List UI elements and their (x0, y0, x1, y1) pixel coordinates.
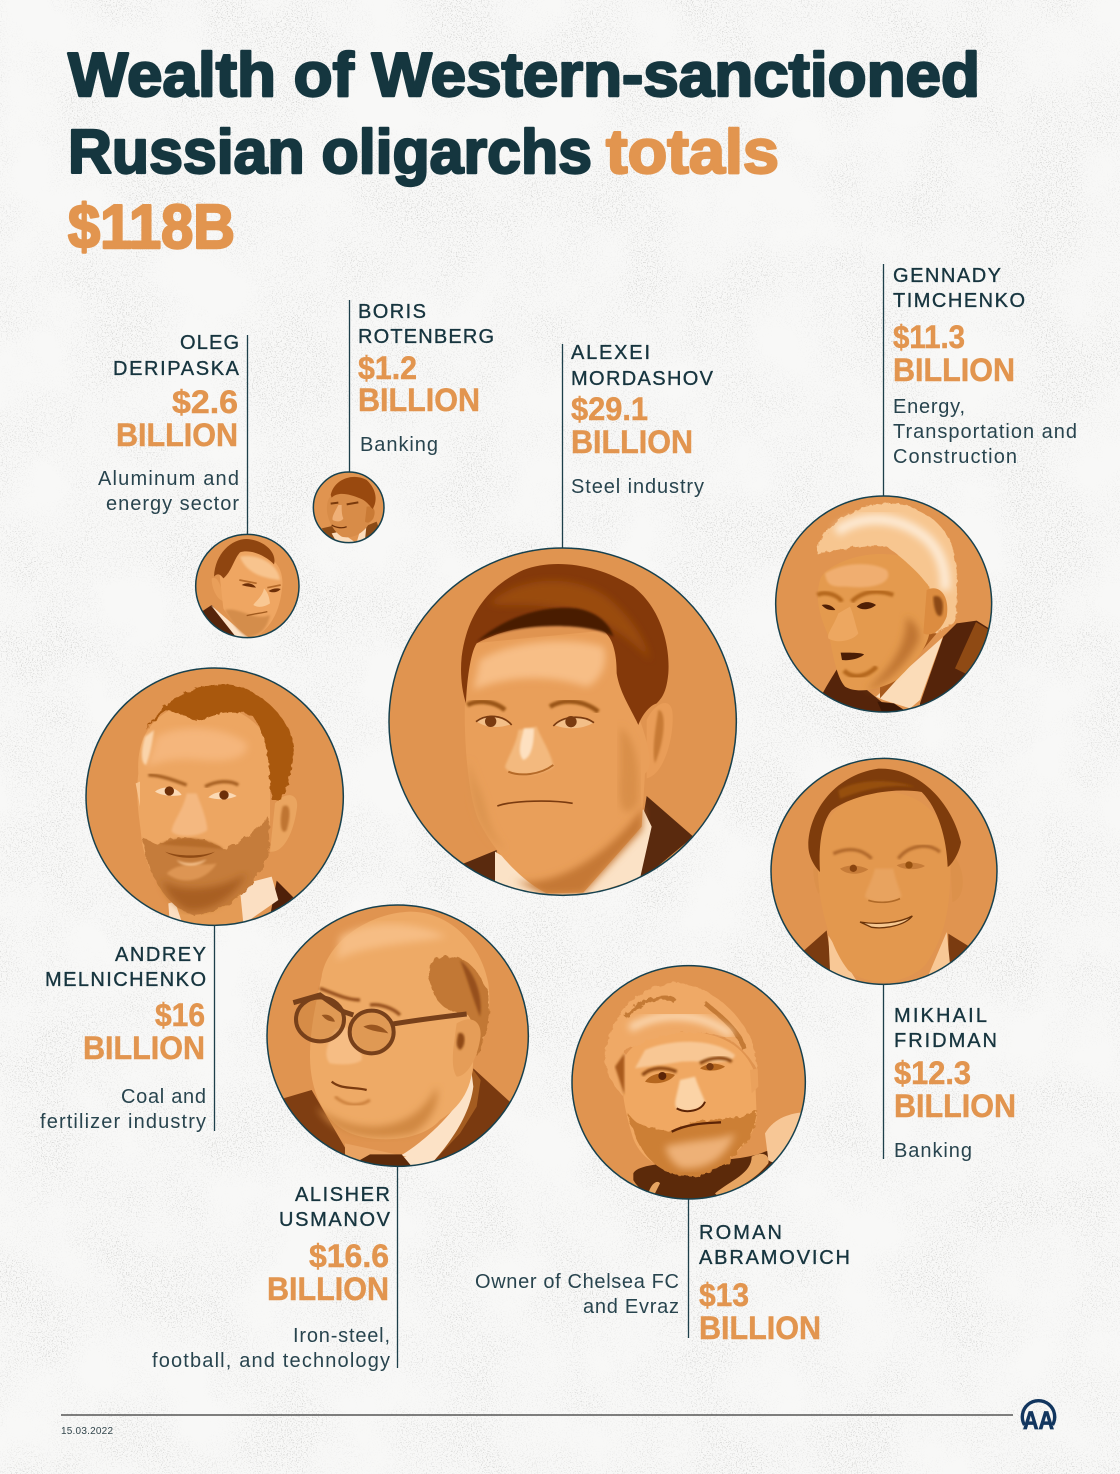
text: Timchenko details: Construction (893, 446, 1017, 468)
text: Mordashov details: MORDASHOV (571, 368, 714, 390)
portrait: Alexei Mordashov (389, 548, 736, 898)
text: Melnichenko details: MELNICHENKO (45, 969, 206, 991)
text: Rotenberg details: BILLION (358, 382, 480, 418)
text: Mordashov details: BILLION (571, 424, 693, 460)
portrait: Roman Abramovich (572, 966, 805, 1203)
panel: Gennady Timchenko (776, 265, 1077, 717)
panel: Oleg Deripaska (98, 332, 299, 640)
text: Fridman details: BILLION (894, 1088, 1016, 1124)
title: Wealth of Western-sanctioned (68, 41, 980, 110)
text: Fridman details: $12.3 (894, 1055, 971, 1091)
footer rule (61, 1414, 1013, 1416)
panel: Andrey Melnichenko (40, 668, 343, 1133)
text: Timchenko details (893, 265, 1077, 468)
text: Usmanov details: BILLION (267, 1271, 389, 1307)
text: Deripaska details: OLEG (180, 332, 239, 354)
connector lines (214, 264, 884, 1368)
text: Fridman details: FRIDMAN (894, 1030, 997, 1052)
text: Deripaska details: $2.6 (172, 384, 238, 420)
text: Timchenko details: Energy, (893, 396, 965, 418)
text: Usmanov details: USMANOV (279, 1209, 391, 1231)
panel: Boris Rotenberg (313, 301, 494, 543)
title: Russian oligarchs (68, 118, 592, 187)
text: Fridman details (894, 1005, 1016, 1162)
text: Abramovich details: and Evraz (583, 1296, 679, 1318)
text: Deripaska details (98, 332, 240, 515)
text: Abramovich details (475, 1222, 850, 1346)
text: Usmanov details: football, and technology (152, 1350, 390, 1372)
text: Timchenko details: GENNADY (893, 265, 1001, 287)
text: Timchenko details: BILLION (893, 352, 1015, 388)
text: Timchenko details: $11.3 (893, 319, 965, 355)
text: Rotenberg details: $1.2 (358, 350, 417, 386)
text: Usmanov details: Iron-steel, (293, 1325, 390, 1347)
icon: AA logo: AA (1023, 1407, 1054, 1435)
text: Rotenberg details: ROTENBERG (358, 326, 494, 348)
title: totals (606, 118, 779, 187)
text: Deripaska details: BILLION (116, 417, 238, 453)
text: Melnichenko details: ANDREY (115, 944, 206, 966)
text: Timchenko details: TIMCHENKO (893, 290, 1025, 312)
text: Melnichenko details: BILLION (83, 1030, 205, 1066)
text: Usmanov details: $16.6 (309, 1238, 389, 1274)
text: Melnichenko details: fertilizer industry (40, 1111, 206, 1133)
date: 15.03.2022 (61, 1426, 113, 1437)
title (68, 41, 980, 262)
text: Melnichenko details (40, 944, 206, 1133)
text: Rotenberg details (358, 301, 494, 456)
panel: Alexei Mordashov (389, 342, 736, 898)
text: Melnichenko details: Coal and (121, 1086, 206, 1108)
text: Abramovich details: $13 (699, 1277, 749, 1313)
text: Abramovich details: Owner of Chelsea FC (475, 1271, 679, 1293)
text: Rotenberg details: BORIS (358, 301, 426, 323)
text: Abramovich details: BILLION (699, 1310, 821, 1346)
text: Abramovich details: ABRAMOVICH (699, 1247, 850, 1269)
text: Fridman details: Banking (894, 1140, 972, 1162)
portrait: Alisher Usmanov (267, 905, 528, 1170)
portrait: Boris Rotenberg (313, 472, 384, 543)
text: Deripaska details: energy sector (106, 493, 239, 515)
text: Fridman details: MIKHAIL (894, 1005, 987, 1027)
text: Deripaska details: DERIPASKA (113, 358, 240, 380)
text: Timchenko details: Transportation and (893, 421, 1077, 443)
text: Usmanov details (152, 1184, 391, 1372)
text: Rotenberg details: Banking (360, 434, 438, 456)
portrait: Oleg Deripaska (196, 534, 299, 640)
text: Usmanov details: ALISHER (295, 1184, 390, 1206)
text: Deripaska details: Aluminum and (98, 468, 239, 490)
text: Mordashov details: ALEXEI (571, 342, 650, 364)
panel: Alisher Usmanov (152, 905, 528, 1372)
text: Melnichenko details: $16 (155, 997, 205, 1033)
portrait: Gennady Timchenko (776, 496, 992, 717)
text: Mordashov details (571, 342, 714, 498)
panel: Roman Abramovich (475, 966, 850, 1346)
portrait: Mikhail Fridman (771, 758, 997, 984)
title: $118B (68, 193, 235, 262)
panel: Mikhail Fridman (771, 758, 1016, 1162)
text: Abramovich details: ROMAN (699, 1222, 782, 1244)
portrait: Andrey Melnichenko (86, 668, 343, 927)
text: Mordashov details: Steel industry (571, 476, 704, 498)
text: Mordashov details: $29.1 (571, 391, 648, 427)
